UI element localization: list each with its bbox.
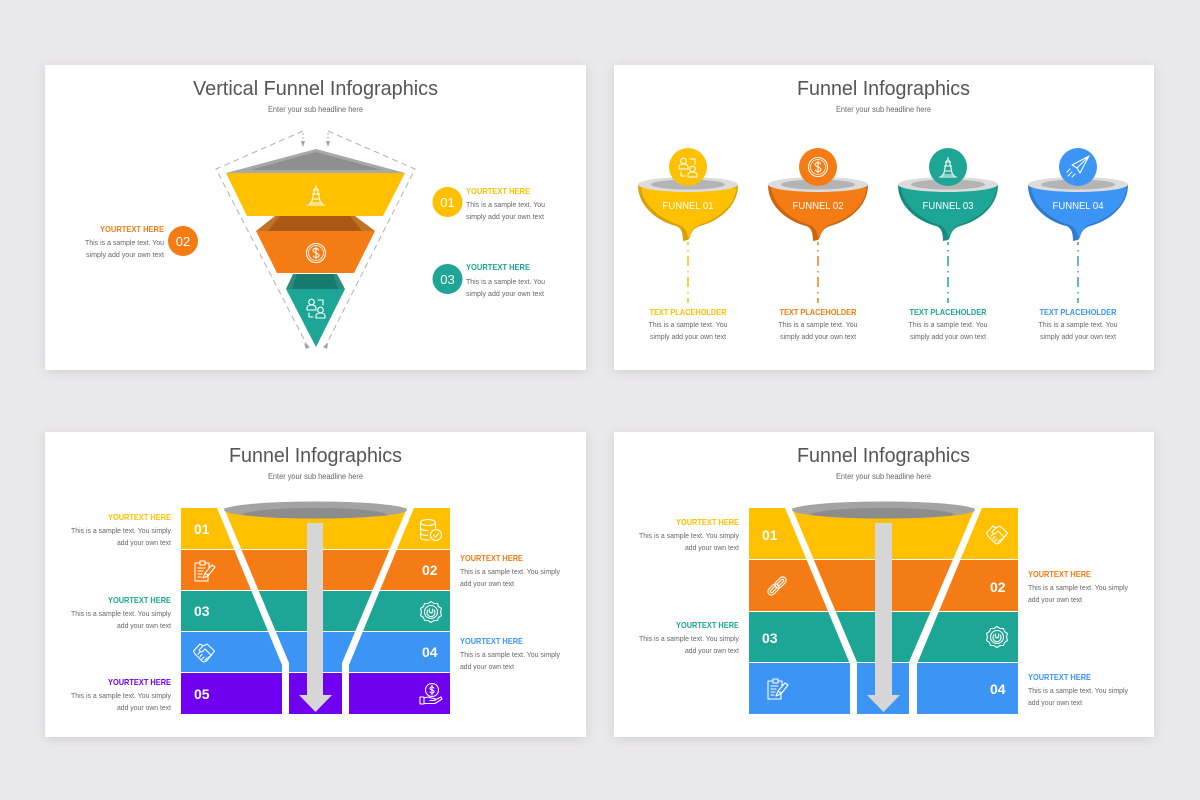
funnel 02	[768, 148, 868, 341]
text: step 2: YOURTEXT HERE	[1028, 569, 1091, 579]
text: step 5: YOURTEXT HERE	[108, 677, 171, 687]
text: step 3	[71, 595, 172, 630]
text: step 2: add your own text	[1028, 595, 1083, 604]
funnel 04: This is a sample text. You	[1038, 320, 1118, 329]
funnel 03: simply add your own text	[910, 332, 987, 341]
text: step 4: This is a sample text. You simply	[460, 650, 560, 659]
dashed outline arrowheads	[301, 141, 330, 349]
band numbers: 01	[194, 521, 210, 537]
text: step 1: add your own text	[117, 538, 172, 547]
callout 01: This is a sample text. You	[466, 200, 545, 209]
text: step 4: YOURTEXT HERE	[460, 636, 523, 646]
callout 01: 01	[440, 195, 455, 210]
text: step 4: This is a sample text. You simply	[1028, 686, 1128, 695]
funnel 02: simply add your own text	[780, 332, 857, 341]
subtitle: Enter your sub headline here	[268, 105, 364, 114]
text: step 2: This is a sample text. You simply	[460, 567, 560, 576]
title: Funnel Infographics	[229, 445, 402, 467]
band numbers: 02	[422, 562, 438, 578]
text: step 3: This is a sample text. You simply	[639, 634, 739, 643]
text: step 1: YOURTEXT HERE	[676, 517, 739, 527]
funnel layer 2	[256, 216, 375, 273]
funnel opening	[792, 502, 975, 518]
text: step 2	[1028, 569, 1128, 604]
callout 02	[85, 224, 198, 259]
colour bands	[749, 508, 1018, 714]
band numbers	[762, 527, 1006, 697]
band numbers: 03	[762, 630, 778, 646]
band icons	[766, 526, 1008, 699]
band numbers: 04	[422, 644, 438, 660]
callout 03: simply add your own text	[466, 289, 545, 298]
funnel 01: TEXT PLACEHOLDER	[650, 307, 726, 317]
band numbers: 05	[194, 686, 210, 702]
callout 02: YOURTEXT HERE	[100, 224, 164, 234]
callout 02: 02	[176, 234, 190, 249]
band numbers	[194, 521, 438, 702]
callout 01	[432, 186, 545, 221]
callout 03: 03	[440, 272, 455, 287]
funnel 04: simply add your own text	[1040, 332, 1117, 341]
text: step 4: YOURTEXT HERE	[1028, 672, 1091, 682]
text: step 3: add your own text	[117, 621, 172, 630]
text: step 4	[460, 636, 560, 671]
band numbers: 04	[990, 681, 1006, 697]
panel: four funnels	[614, 65, 1154, 370]
funnel layer 1	[226, 173, 405, 216]
funnel 02: FUNNEL 02	[792, 201, 844, 212]
text: step 2: add your own text	[460, 579, 515, 588]
arrow	[299, 523, 332, 712]
text: step 4: add your own text	[460, 662, 515, 671]
title: Funnel Infographics	[797, 78, 970, 100]
subtitle: Enter your sub headline here	[836, 105, 932, 114]
title: Funnel Infographics	[797, 445, 970, 467]
text: step 1	[71, 512, 172, 547]
funnel 03: This is a sample text. You	[908, 320, 988, 329]
callout 01: YOURTEXT HERE	[466, 186, 530, 196]
band icons	[194, 520, 442, 704]
subtitle: Enter your sub headline here	[836, 472, 932, 481]
text: step 3: YOURTEXT HERE	[108, 595, 171, 605]
band numbers: 01	[762, 527, 778, 543]
text: step 4: add your own text	[1028, 698, 1083, 707]
arrow	[867, 523, 900, 712]
funnel 02: TEXT PLACEHOLDER	[780, 307, 856, 317]
callout 02: This is a sample text. You	[85, 238, 164, 247]
text: step 1	[639, 517, 740, 552]
funnel 03: TEXT PLACEHOLDER	[910, 307, 986, 317]
text: step 1: This is a sample text. You simply	[639, 531, 739, 540]
dashed outline	[216, 131, 415, 347]
funnel 02: This is a sample text. You	[778, 320, 858, 329]
panel: five-step funnel	[45, 432, 586, 737]
funnel 01: FUNNEL 01	[662, 201, 714, 212]
funnel 04: TEXT PLACEHOLDER	[1040, 307, 1116, 317]
title: Vertical Funnel Infographics	[193, 78, 438, 100]
funnel top opening	[226, 149, 405, 173]
text: step 2	[460, 553, 560, 588]
band numbers: 03	[194, 603, 210, 619]
text: step 3	[639, 620, 740, 655]
callout 03: This is a sample text. You	[466, 277, 545, 286]
callout 03	[432, 262, 545, 298]
panel: vertical funnel	[45, 65, 586, 370]
callout 03: YOURTEXT HERE	[466, 262, 530, 272]
subtitle: Enter your sub headline here	[268, 472, 364, 481]
text: step 1: YOURTEXT HERE	[108, 512, 171, 522]
text: step 2: This is a sample text. You simply	[1028, 583, 1128, 592]
colour bands	[181, 508, 450, 714]
funnel 01: This is a sample text. You	[648, 320, 728, 329]
text: step 3: This is a sample text. You simply	[71, 609, 171, 618]
callout 01: simply add your own text	[466, 212, 545, 221]
funnel 04: FUNNEL 04	[1052, 201, 1104, 212]
text: step 3: add your own text	[685, 646, 740, 655]
funnel 03	[898, 148, 998, 341]
funnel opening	[224, 502, 407, 518]
panel: four-step funnel	[614, 432, 1154, 737]
text: step 2: YOURTEXT HERE	[460, 553, 523, 563]
text: step 1: This is a sample text. You simply	[71, 526, 171, 535]
funnel 01: simply add your own text	[650, 332, 727, 341]
text: step 5: This is a sample text. You simply	[71, 691, 171, 700]
text: step 1: add your own text	[685, 543, 740, 552]
funnel 03: FUNNEL 03	[922, 201, 974, 212]
funnel outline	[785, 508, 982, 714]
funnel outline	[217, 508, 414, 714]
text: step 5: add your own text	[117, 703, 172, 712]
callout 02: simply add your own text	[86, 250, 165, 259]
funnel 04	[1028, 148, 1128, 341]
funnel layer 3	[286, 274, 345, 347]
text: step 5	[71, 677, 172, 712]
band numbers: 02	[990, 579, 1006, 595]
text: step 3: YOURTEXT HERE	[676, 620, 739, 630]
funnel 01	[638, 148, 738, 341]
text: step 4	[1028, 672, 1128, 707]
